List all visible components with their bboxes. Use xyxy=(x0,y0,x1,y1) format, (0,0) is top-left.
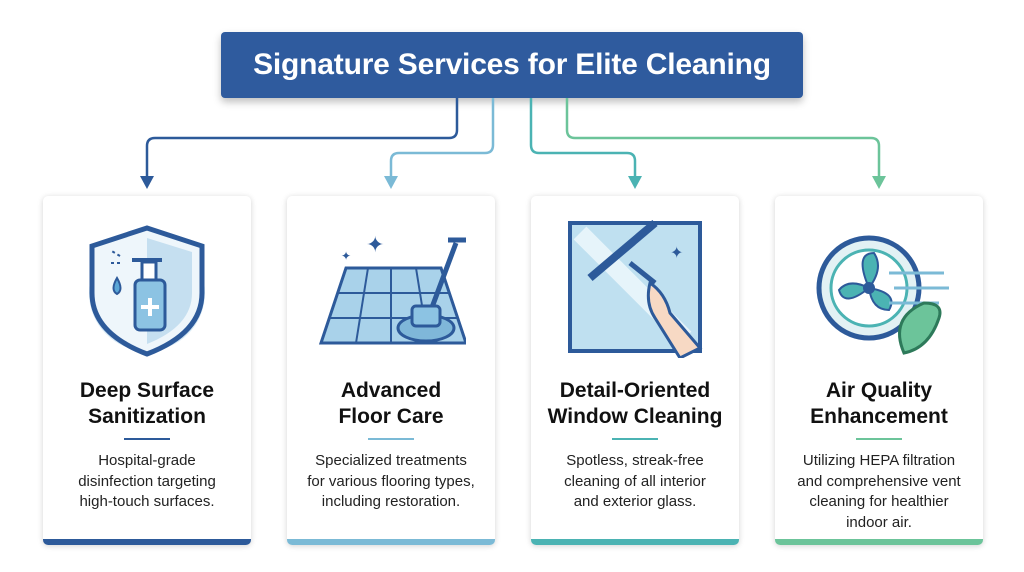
description: indoor air. xyxy=(846,514,912,530)
icon: floor polisher: ✦ xyxy=(341,249,351,263)
heading xyxy=(548,379,722,428)
title xyxy=(221,32,803,98)
heading: Sanitization xyxy=(88,405,206,428)
heading xyxy=(80,379,214,428)
heading xyxy=(810,379,948,428)
heading: Deep Surface xyxy=(80,379,214,402)
heading: Advanced xyxy=(341,379,441,402)
description: Hospital-grade xyxy=(98,452,196,469)
description xyxy=(307,452,475,510)
description: for various flooring types, xyxy=(307,472,475,490)
panel: air quality xyxy=(775,196,983,545)
heading: Detail-Oriented xyxy=(560,379,710,402)
panel: window cleaning xyxy=(531,196,739,545)
heading: Air Quality xyxy=(826,379,932,402)
icon: floor polisher: ✦ xyxy=(366,232,384,257)
description: including restoration. xyxy=(322,493,460,510)
heading xyxy=(338,379,444,428)
description xyxy=(78,452,216,510)
description: high-touch surfaces. xyxy=(79,493,215,510)
icon: shield spray xyxy=(89,225,205,357)
description xyxy=(797,452,961,530)
connector arrows xyxy=(140,98,886,189)
description: disinfection targeting xyxy=(78,472,216,490)
description xyxy=(564,452,706,510)
description: cleaning for healthier xyxy=(809,493,949,510)
description: and comprehensive vent xyxy=(797,472,961,490)
panel: sanitization xyxy=(43,196,251,545)
description: cleaning of all interior xyxy=(564,472,706,490)
panel: floor care xyxy=(287,196,495,545)
icon: floor polisher xyxy=(319,232,466,344)
heading: Window Cleaning xyxy=(548,405,722,428)
description: and exterior glass. xyxy=(574,493,696,510)
heading: Enhancement xyxy=(810,405,948,428)
icon: fan leaf xyxy=(816,236,949,355)
description: Utilizing HEPA filtration xyxy=(803,452,955,469)
heading: Floor Care xyxy=(338,405,444,428)
description: Spotless, streak-free xyxy=(566,452,704,469)
title: Signature Services for Elite Cleaning xyxy=(253,48,771,81)
description: Specialized treatments xyxy=(315,452,467,469)
icon: squeegee window xyxy=(568,220,702,358)
icon: squeegee window: ✦ xyxy=(670,245,683,262)
